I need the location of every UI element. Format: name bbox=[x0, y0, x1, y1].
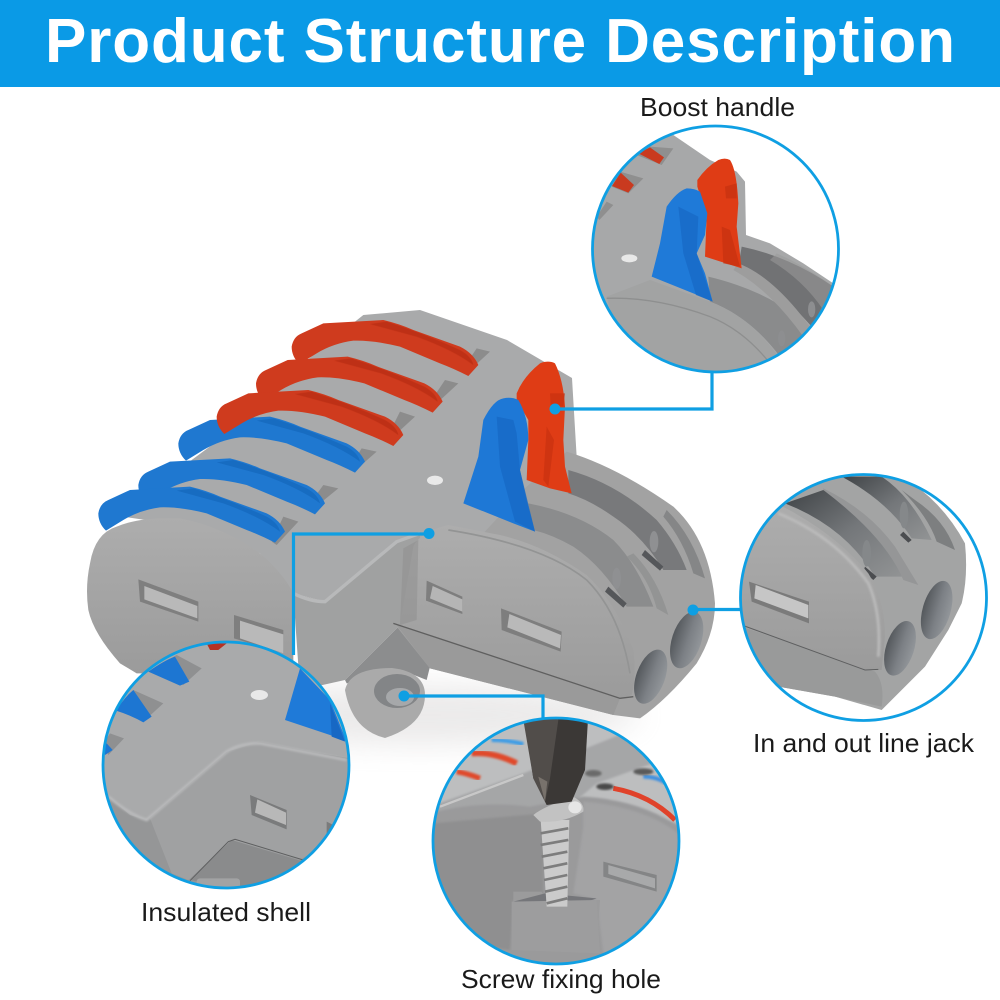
title text: Product Structure Description bbox=[45, 7, 955, 76]
channel pins bbox=[612, 568, 621, 589]
red upright lever bbox=[517, 362, 572, 493]
title banner bbox=[0, 0, 1000, 87]
connector line: line jack bbox=[688, 604, 742, 616]
inner corner shade bbox=[400, 540, 418, 625]
wire holes bbox=[628, 645, 674, 708]
front face bbox=[400, 525, 635, 698]
channel outer ribs bbox=[663, 510, 705, 578]
main product photo: wire connector bbox=[87, 310, 715, 738]
blue levers bbox=[98, 417, 365, 543]
left block front face bbox=[87, 518, 293, 673]
middle channel bbox=[528, 503, 653, 607]
connector line: screw fixing hole bbox=[398, 690, 543, 722]
rivet dot bbox=[427, 476, 443, 485]
lever grooves bbox=[177, 418, 360, 532]
connector line: boost handle bbox=[550, 372, 712, 414]
T stem recess bbox=[345, 625, 430, 683]
label: insulated shell: Insulated shell bbox=[141, 897, 311, 927]
callout circle: in and out line jack bbox=[735, 470, 986, 720]
seam bbox=[393, 623, 633, 698]
blue upright lever bbox=[463, 398, 535, 532]
label: screw fixing hole: Screw fixing hole bbox=[461, 964, 661, 994]
right block body bbox=[397, 452, 715, 718]
callout circle: boost handle bbox=[590, 126, 850, 387]
T stem face bbox=[293, 533, 420, 690]
label: boost handle: Boost handle bbox=[640, 92, 795, 122]
connector line: insulated shell bbox=[294, 528, 434, 655]
T section face and right block bbox=[393, 362, 715, 718]
lever slots bbox=[272, 348, 490, 545]
front lip bbox=[448, 530, 630, 673]
callout circle: insulated shell bbox=[100, 640, 360, 900]
label: in and out line jack: In and out line jack bbox=[753, 728, 975, 758]
lower base bbox=[397, 625, 620, 715]
callout circle: screw fixing hole bbox=[432, 716, 680, 966]
left block windows bbox=[138, 579, 283, 653]
T corner highlight bbox=[293, 533, 420, 602]
red levers bbox=[217, 320, 478, 446]
face windows bbox=[426, 581, 462, 614]
soft shadow under connector bbox=[200, 685, 640, 745]
screw fixing ring bbox=[345, 668, 425, 738]
rear channel bbox=[568, 470, 687, 570]
connector top surface and left block bbox=[87, 310, 577, 690]
